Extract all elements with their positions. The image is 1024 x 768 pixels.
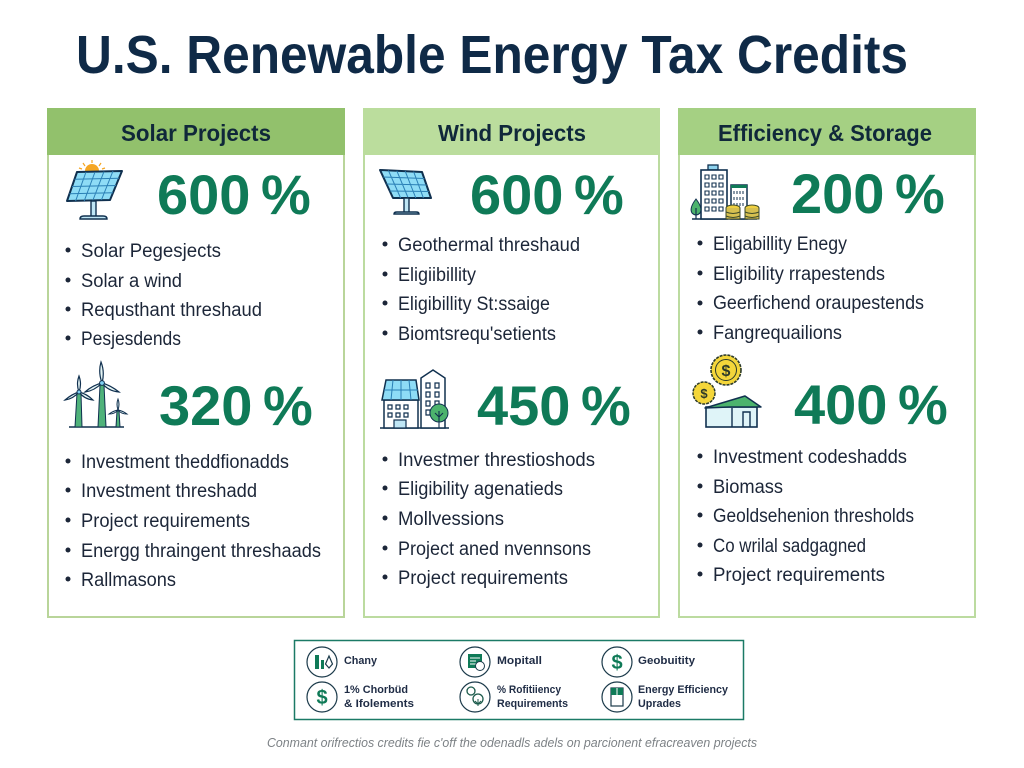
bullet list: efficiency lower: Biomass: [713, 477, 783, 498]
bullet list: solar upper: Solar Pegesjects: [81, 241, 221, 262]
legend item: Mopitall: Mopitall: [497, 655, 542, 667]
bullet list: efficiency lower: Geoldsehenion thresholds: [713, 506, 914, 527]
bullet list: wind lower: [382, 450, 595, 589]
bullet list: wind upper: Geothermal threshaud: [398, 235, 580, 256]
panel: solar projects: [47, 108, 345, 617]
bullet list: efficiency upper: Fangrequailions: [713, 323, 842, 344]
bullet list: wind upper: [382, 235, 580, 345]
legend item: 1% Chorbüd & Ifolements: [307, 682, 414, 712]
stat: 450 %: 450 %: [477, 374, 631, 437]
header: wind projects: Wind Projects: [438, 120, 586, 146]
bullet list: efficiency lower: Project requirements: [713, 565, 885, 586]
bullet list: wind lower: Project aned nvennsons: [398, 539, 591, 560]
bullet list: wind upper: Biomtsrequ'setients: [398, 324, 556, 345]
icon: house with dollar coins: $: [700, 386, 708, 401]
panel: efficiency and storage: [678, 108, 976, 617]
icon: buildings with solar roof and tree: [380, 370, 449, 428]
legend item: 1% Chorbüd & Ifolements: $: [316, 687, 328, 709]
stat: 600 %: 600 %: [470, 163, 624, 226]
bullet list: solar upper: Solar a wind: [81, 271, 182, 292]
icon: solar panel with sun: [67, 160, 122, 219]
bullet list: solar lower: [66, 452, 321, 591]
legend item: Energy Efficiency Uprades: [602, 682, 729, 712]
legend item: Chany: Chany: [344, 655, 378, 667]
bullet list: efficiency upper: [698, 234, 924, 344]
title: U.S. Renewable Energy Tax Credits: [76, 25, 908, 85]
bullet list: wind lower: Eligibility agenatieds: [398, 479, 563, 500]
legend item: Chany: [307, 647, 378, 677]
bullet list: solar lower: Investment theddfionadds: [81, 452, 289, 473]
panel: wind projects: [363, 108, 660, 617]
legend item: Energy Efficiency Uprades: Energy Efficiency: [638, 684, 729, 696]
stat: 320 %: 320 %: [159, 374, 313, 437]
legend item: Mopitall: [460, 647, 542, 677]
stat: 600 %: 600 %: [157, 163, 311, 226]
bullet list: solar upper: Pesjesdends: [81, 329, 181, 350]
bullet list: efficiency lower: Co wrilal sadgagned: [713, 536, 866, 557]
legend item: Geobuitity: [602, 647, 696, 677]
legend item: Energy Efficiency Uprades: Uprades: [638, 698, 681, 710]
stat: 400 %: 400 %: [794, 373, 948, 436]
stat: 200 %: 200 %: [791, 162, 945, 225]
legend item: 1% Chorbüd & Ifolements: & Ifolements: [344, 698, 414, 710]
legend item: % Rofitiiency Requirements: Requirements: [497, 698, 568, 710]
bullet list: wind upper: Eligibillity St:ssaige: [398, 294, 550, 315]
header: efficiency and storage: Efficiency & Storage: [718, 120, 932, 146]
bullet list: wind upper: Eligiibillity: [398, 265, 476, 286]
footnote: Conmant orifrectios credits fie c'off the odenadls adels on parcionent efracreaven projects: [267, 735, 757, 750]
bullet list: solar lower: Investment threshadd: [81, 481, 257, 502]
legend item: % Rofitiiency Requirements: [460, 682, 568, 712]
header: solar projects: Solar Projects: [121, 120, 271, 146]
bullet list: efficiency upper: Eligabillity Enegy: [713, 234, 847, 255]
header: wind projects: [363, 108, 660, 155]
header: solar projects: [47, 108, 345, 155]
icon: solar panel: [380, 170, 431, 214]
bullet list: efficiency upper: Geerfichend oraupestends: [713, 293, 924, 314]
bullet list: solar lower: Rallmasons: [81, 570, 176, 591]
header: efficiency and storage: [678, 108, 976, 155]
icon: house with dollar coins: $: [722, 363, 731, 380]
legend item: % Rofitiiency Requirements: % Rofitiiency: [497, 684, 562, 696]
bullet list: wind lower: Project requirements: [398, 568, 568, 589]
legend item: 1% Chorbüd & Ifolements: 1% Chorbüd: [344, 684, 408, 696]
icon: office buildings with coins: [691, 165, 759, 219]
legend item: Geobuitity: Geobuitity: [638, 655, 696, 667]
bullet list: wind lower: Investmer threstioshods: [398, 450, 595, 471]
bullet list: efficiency lower: Investment codeshadds: [713, 447, 907, 468]
bullet list: solar upper: [66, 241, 262, 350]
legend: [294, 640, 744, 720]
bullet list: efficiency lower: [698, 447, 914, 586]
icon: wind turbines: [65, 362, 127, 427]
bullet list: wind lower: Mollvessions: [398, 509, 504, 530]
bullet list: solar lower: Project requirements: [81, 511, 250, 532]
legend item: Geobuitity: $: [611, 652, 623, 674]
bullet list: solar lower: Energg thraingent threshaads: [81, 541, 321, 562]
icon: house with dollar coins: [693, 355, 761, 427]
bullet list: efficiency upper: Eligibility rrapestends: [713, 264, 885, 285]
bullet list: solar upper: Requsthant threshaud: [81, 300, 262, 321]
